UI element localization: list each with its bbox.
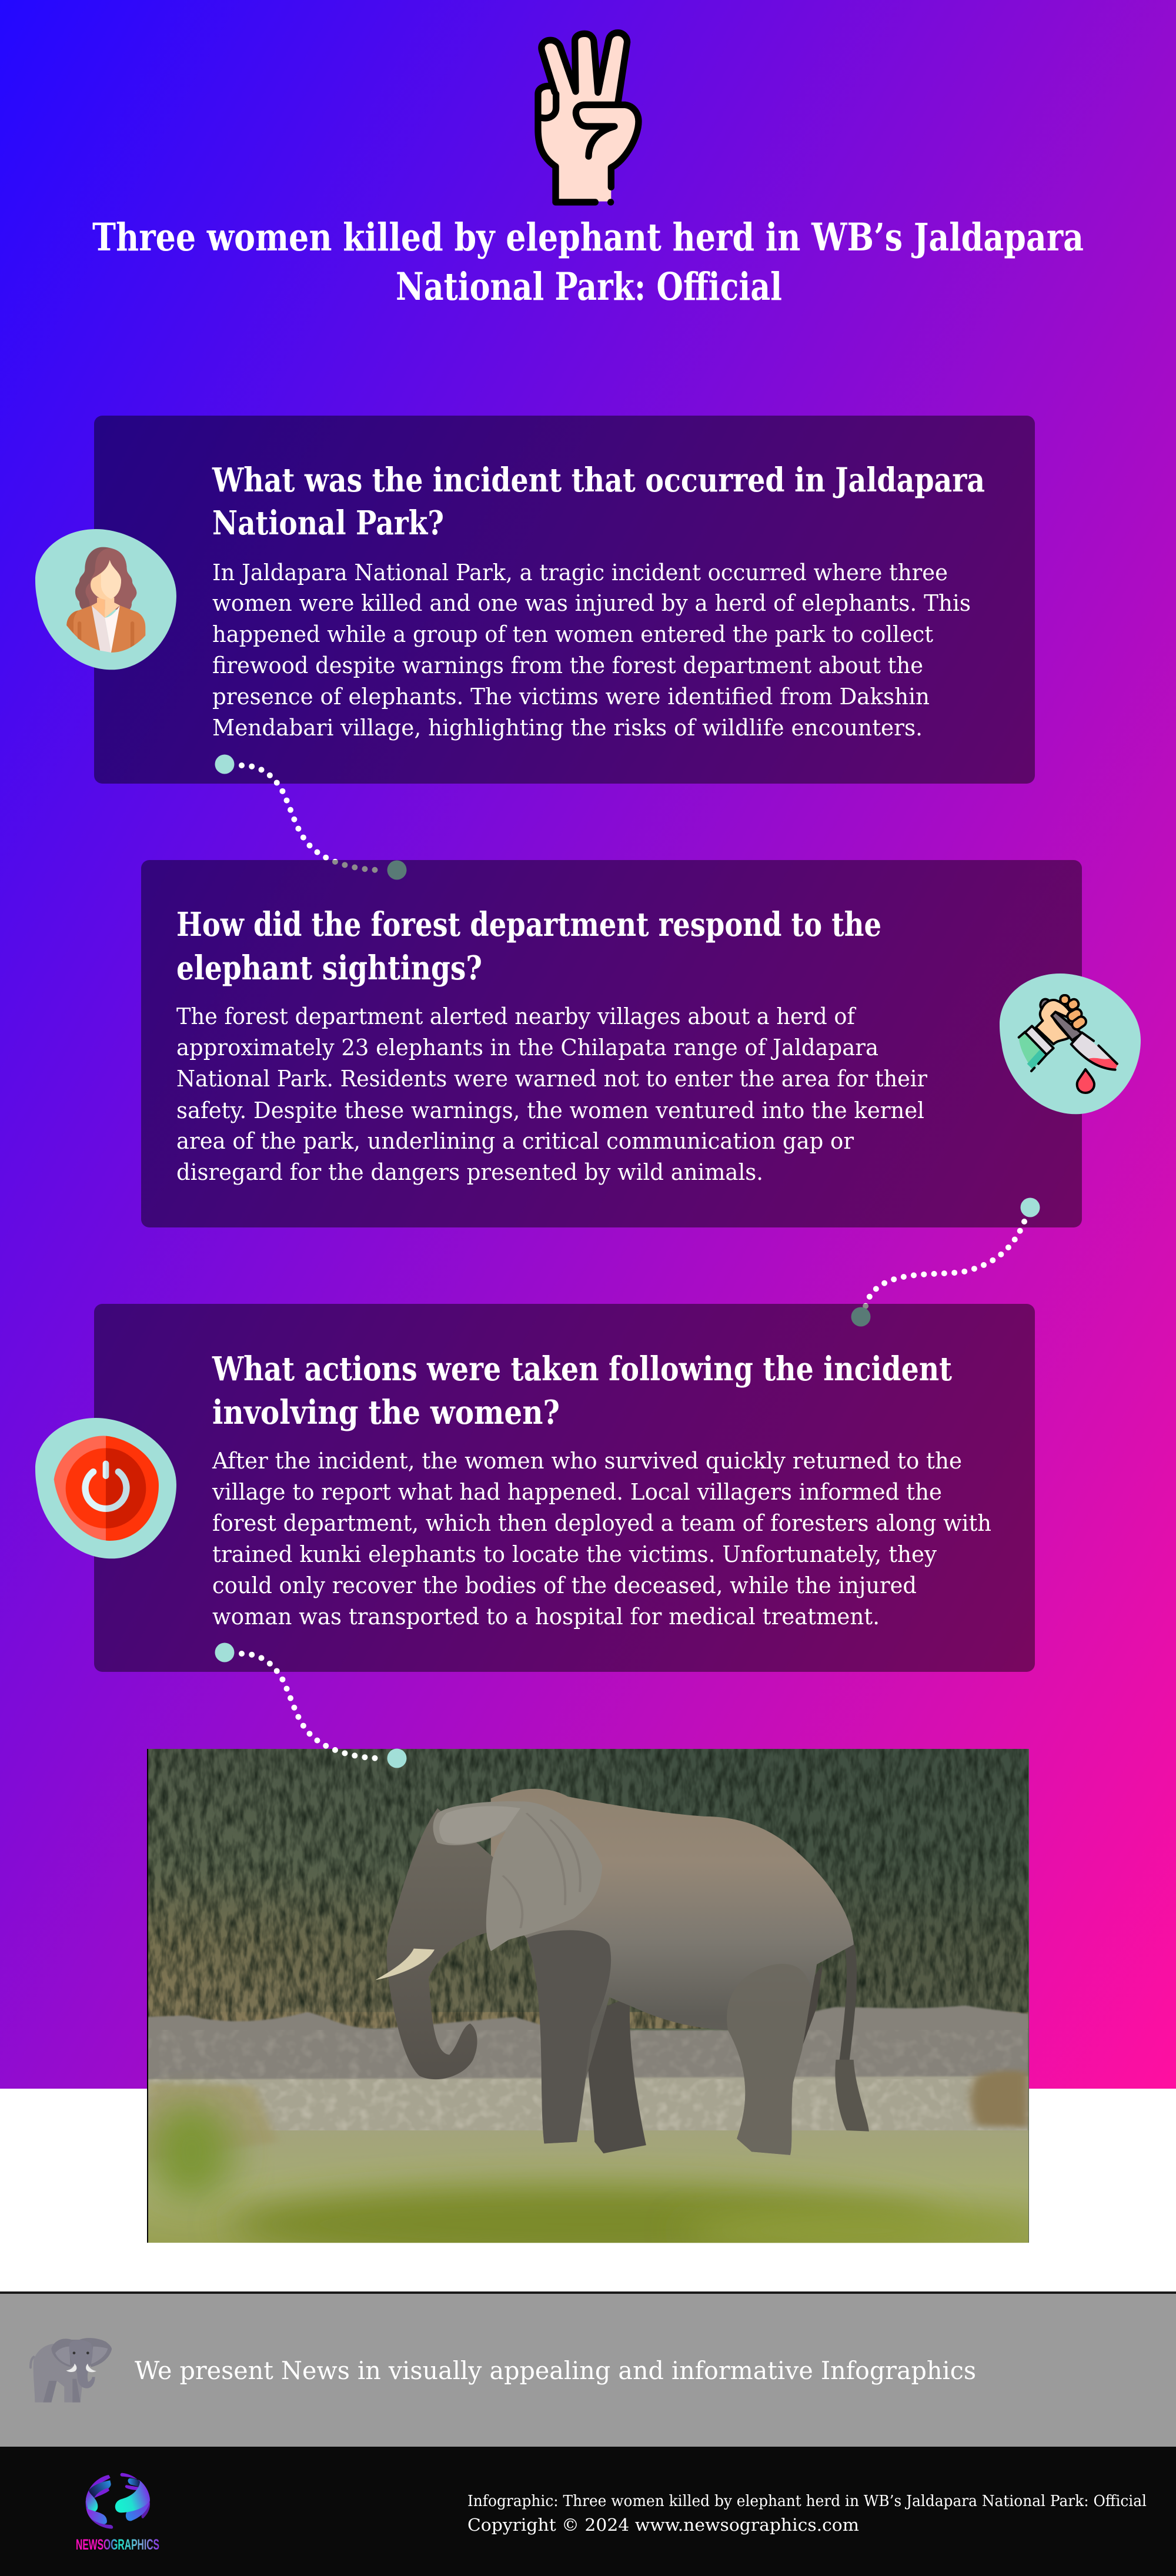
elephant far legs and tail — [586, 1938, 869, 2153]
icon: power button on teal blob — [35, 1418, 176, 1558]
footer credit text: Infographic: Three women killed by elephant herd in WB’s Jaldapara National Park: Official — [467, 2493, 1147, 2510]
footer credit text: Copyright © 2024 www.newsographics.com — [467, 2515, 859, 2535]
panel: forest department response — [141, 860, 1082, 1227]
connector: panel 3 to photo — [215, 1642, 407, 1768]
text block: actions: could only recover the bodies of the deceased, while the injured — [212, 1573, 917, 1598]
text block: actions: trained kunki elephants to locate the victims. Unfortunately, they — [212, 1541, 937, 1567]
text block: response: safety. Despite these warnings, the women ventured into the kernel — [176, 1098, 924, 1123]
heading: incident: What was the incident that occurred in Jaldapara — [212, 461, 985, 500]
connector: panel 1 to panel 2 — [215, 755, 407, 879]
text block: response: approximately 23 elephants in the Chilapata range of Jaldapara — [176, 1035, 878, 1060]
text block: incident: happened while a group of ten women entered the park to collect — [212, 621, 933, 647]
text block: response: area of the park, underlining a critical communication gap or — [176, 1128, 854, 1154]
logo: Newsographics: NEWSOGRAPHICS — [76, 2537, 159, 2553]
text block: incident: In Jaldapara National Park, a tragic incident occurred where three — [212, 560, 948, 586]
panel: incident — [94, 416, 1035, 784]
text block: actions: woman was transported to a hospital for medical treatment. — [212, 1604, 880, 1630]
tagline: We present News in visually appealing and informative Infographics — [135, 2356, 976, 2385]
heading: response: elephant sightings? — [176, 949, 482, 988]
icon: woman on teal blob — [35, 529, 176, 670]
footer — [0, 2447, 1176, 2576]
elephant tusk — [375, 1949, 435, 1980]
photo: elephant standing in front of forest — [147, 1749, 1042, 2263]
text block: actions: After the incident, the women who survived quickly returned to the — [212, 1448, 962, 1474]
text block: actions: village to report what had happened. Local villagers informed the — [212, 1479, 942, 1505]
heading: actions — [212, 1350, 952, 1432]
text block: incident: women were killed and one was injured by a herd of elephants. This — [212, 590, 971, 616]
text block: response: The forest department alerted nearby villages about a herd of — [176, 1003, 857, 1029]
heading: response — [176, 905, 881, 988]
heading: incident — [212, 461, 985, 543]
logo: Newsographics — [76, 2473, 159, 2553]
footer credit text — [467, 2493, 1147, 2535]
text block: response: National Park. Residents were warned not to enter the area for their — [176, 1066, 928, 1092]
title — [92, 215, 1084, 309]
text block: actions: forest department, which then deployed a team of foresters along with — [212, 1510, 991, 1536]
heading: incident: National Park? — [212, 504, 444, 543]
text block: response: disregard for the dangers presented by wild animals. — [176, 1159, 763, 1185]
blurred foreground foliage — [150, 2102, 233, 2201]
heading: response: How did the forest department respond to the — [176, 905, 881, 944]
elephant ear — [433, 1801, 602, 1951]
band: tagline strip — [0, 2291, 1176, 2447]
icon: grey elephant — [31, 2338, 112, 2403]
text block: response — [176, 1003, 928, 1185]
icon: hand with bloody knife on teal blob — [1000, 973, 1141, 1114]
text block: incident: Mendabari village, highlighting the risks of wildlife encounters. — [212, 715, 923, 741]
text block: incident: presence of elephants. The victims were identified from Dakshin — [212, 684, 930, 710]
text block: incident — [212, 560, 971, 741]
heading: actions: involving the women? — [212, 1393, 560, 1432]
icon: hand showing three fingers — [538, 33, 639, 206]
panel: actions taken — [94, 1304, 1035, 1672]
text block: incident: firewood despite warnings from the forest department about the — [212, 653, 923, 678]
title: National Park: Official — [396, 265, 782, 309]
rock wall — [148, 2005, 1028, 2080]
connector: panel 2 to panel 3 — [851, 1198, 1040, 1326]
heading: actions: What actions were taken following the incident — [212, 1350, 952, 1389]
elephant body — [491, 1789, 854, 2155]
elephant head and trunk — [387, 1808, 503, 2079]
text block: actions — [212, 1448, 991, 1630]
